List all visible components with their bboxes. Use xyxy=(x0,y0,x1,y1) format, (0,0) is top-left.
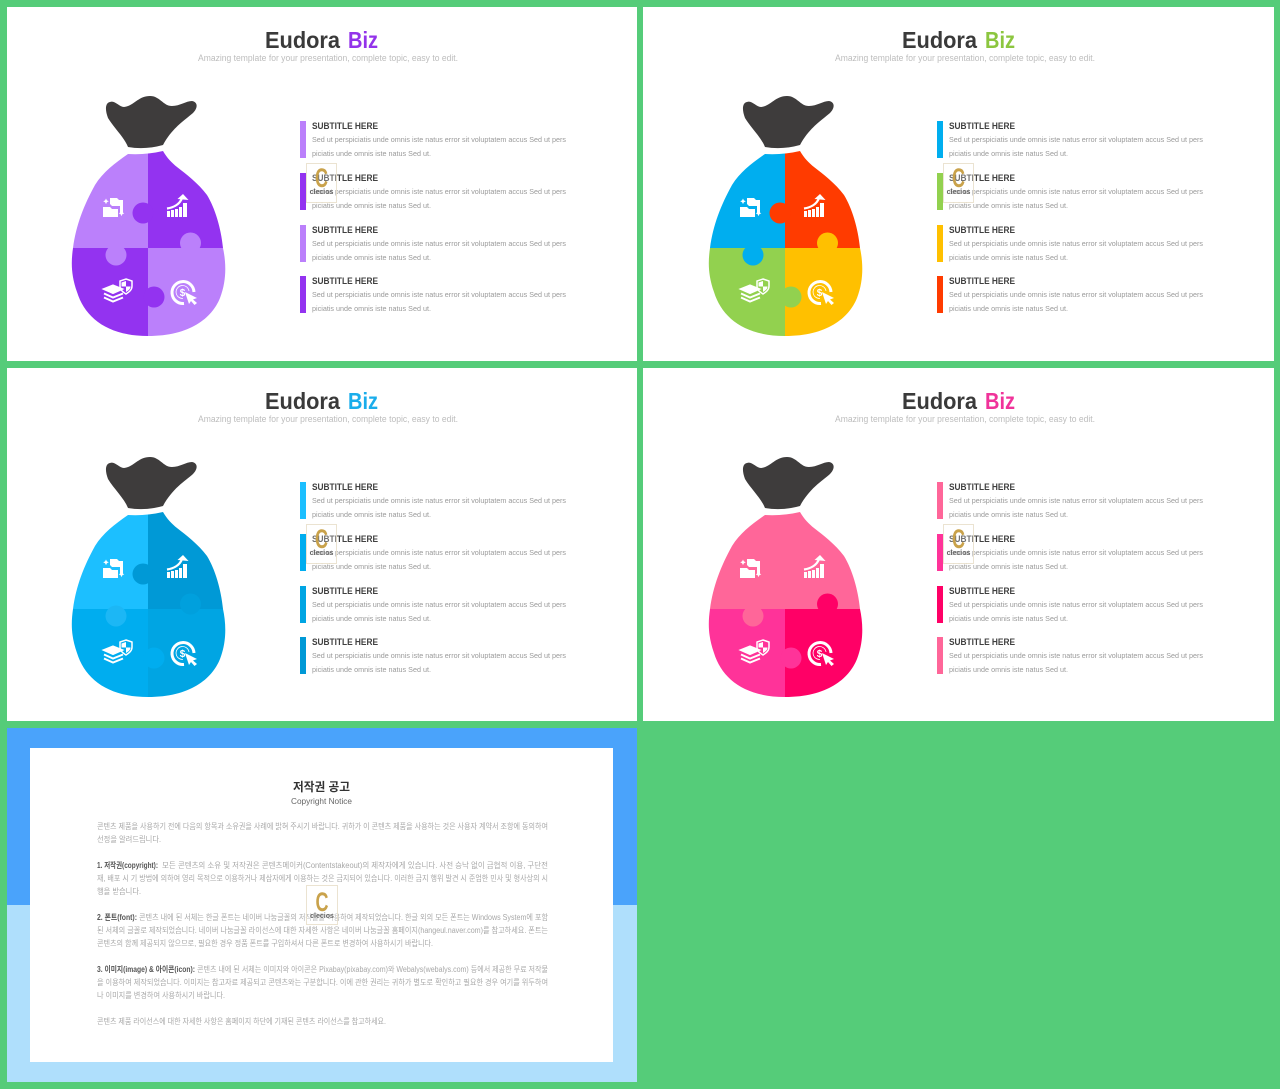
list item 2: SUBTITLE HERE xyxy=(312,534,378,545)
section 2: font: 콘텐츠 내에 된 서체는 한글 폰트는 네이버 나눔글꼴의 저작물을 이용하여 제작되었습니다. 한글 외의 모든 폰트는 Windows System에 포함 xyxy=(139,912,549,922)
list item 3 xyxy=(300,586,566,623)
list item 1: Sed ut perspiciatis unde omnis iste natus error sit voluptatem accus Sed ut pers xyxy=(949,135,1203,144)
puzzle money bag xyxy=(708,512,862,697)
list item 4 xyxy=(300,276,566,313)
tagline: Amazing template for your presentation, complete topic, easy to edit. xyxy=(835,53,1095,63)
list item 3: piciatis unde omnis iste natus Sed ut. xyxy=(312,614,431,623)
watermark: C xyxy=(952,163,965,193)
list item 4: piciatis unde omnis iste natus Sed ut. xyxy=(312,304,431,313)
icon: secure stack xyxy=(741,279,769,302)
list item 3 xyxy=(937,586,1203,623)
section 1: copyright: 모든 콘텐츠의 소유 및 저작권은 콘텐츠메이커(Contentstakeout)의 제작자에게 있습니다. 사전 승낙 없이 금협적 이용, 구단전 xyxy=(162,860,548,870)
icon: secure stack xyxy=(741,640,769,662)
title: Eudora xyxy=(902,27,977,53)
icon: secure stack xyxy=(104,640,132,662)
money bag tie xyxy=(743,457,834,509)
list item 1: SUBTITLE HERE xyxy=(949,482,1015,493)
list item 1: SUBTITLE HERE xyxy=(312,121,378,132)
section 3: image and icon: 을 이용하여 제작되었습니다. 이미지는 참고자료 제공되고 콘텐츠와는 구분합니다. 이에 관한 권리는 귀하가 별도로 확인하고 필요한 경우 여기를 위두하여 xyxy=(97,977,548,987)
title: Biz xyxy=(985,27,1015,53)
list item 3: SUBTITLE HERE xyxy=(949,586,1015,597)
list item 1: Sed ut perspiciatis unde omnis iste natus error sit voluptatem accus Sed ut pers xyxy=(312,135,566,144)
list item 1 xyxy=(300,121,566,158)
icon: growth chart xyxy=(804,555,826,578)
icon: folders xyxy=(103,198,124,217)
tagline: Amazing template for your presentation, complete topic, easy to edit. xyxy=(198,414,458,424)
panel: pink slide xyxy=(643,368,1274,721)
panel: blue slide xyxy=(7,368,637,721)
icon: dollar click xyxy=(809,643,834,666)
list item 4: SUBTITLE HERE xyxy=(949,637,1015,648)
section 2: font: 된 서체의 글꼴로 제작되었습니다. 네이버 나눔글꼴 라이선스에 대한 자세한 사항은 네이버 나눔글꼴 홈페이지(hangeul.naver.com)를 참고하세요. 폰트는 xyxy=(97,925,548,935)
list item 2: piciatis unde omnis iste natus Sed ut. xyxy=(312,201,431,210)
list item 4: SUBTITLE HERE xyxy=(312,637,378,648)
list item 2: piciatis unde omnis iste natus Sed ut. xyxy=(949,562,1068,571)
list item 4: piciatis unde omnis iste natus Sed ut. xyxy=(949,665,1068,674)
list item 3: piciatis unde omnis iste natus Sed ut. xyxy=(949,614,1068,623)
watermark xyxy=(944,163,974,202)
list item 4 xyxy=(300,637,566,674)
list item 1: piciatis unde omnis iste natus Sed ut. xyxy=(312,510,431,519)
title: Biz xyxy=(985,388,1015,414)
slide background xyxy=(643,368,1274,721)
intro paragraph xyxy=(97,821,548,844)
list item 2: SUBTITLE HERE xyxy=(949,534,1015,545)
panel: multicolor slide xyxy=(643,7,1274,361)
tagline: Amazing template for your presentation, complete topic, easy to edit. xyxy=(198,53,458,63)
list item 1: piciatis unde omnis iste natus Sed ut. xyxy=(949,510,1068,519)
icon: secure stack xyxy=(104,279,132,302)
list item 2 xyxy=(937,534,1203,571)
money bag tie xyxy=(106,457,197,509)
list item 3: Sed ut perspiciatis unde omnis iste natus error sit voluptatem accus Sed ut pers xyxy=(949,239,1203,248)
watermark xyxy=(944,524,974,564)
panel: purple slide xyxy=(7,7,637,361)
list item 2: SUBTITLE HERE xyxy=(312,173,378,184)
list item 2: Sed ut perspiciatis unde omnis iste natus error sit voluptatem accus Sed ut pers xyxy=(312,548,566,557)
list item 2: Sed ut perspiciatis unde omnis iste natus error sit voluptatem accus Sed ut pers xyxy=(312,187,566,196)
icon: growth chart xyxy=(167,555,188,578)
list item 1: Sed ut perspiciatis unde omnis iste natus error sit voluptatem accus Sed ut pers xyxy=(949,496,1203,505)
list item 4 xyxy=(937,637,1203,674)
icon: dollar click: $ xyxy=(817,649,823,660)
list item 2 xyxy=(937,173,1203,210)
title: Eudora xyxy=(902,388,977,414)
list item 1: Sed ut perspiciatis unde omnis iste natus error sit voluptatem accus Sed ut pers xyxy=(312,496,566,505)
notice card xyxy=(30,748,613,1062)
watermark: C xyxy=(315,524,328,554)
puzzle money bag xyxy=(72,151,226,336)
list item 2: piciatis unde omnis iste natus Sed ut. xyxy=(949,201,1068,210)
icon: dollar click xyxy=(172,643,197,666)
watermark: clecios xyxy=(947,550,970,557)
light blue band xyxy=(7,905,637,1082)
list item 4: Sed ut perspiciatis unde omnis iste natus error sit voluptatem accus Sed ut pers xyxy=(949,290,1203,299)
notice heading: 저작권 공고 xyxy=(293,779,350,794)
intro paragraph: 선정을 알려드립니다. xyxy=(97,834,161,844)
section 2: font: 2. 폰트(font): xyxy=(97,913,137,922)
list item 1: piciatis unde omnis iste natus Sed ut. xyxy=(949,149,1068,158)
list item 1: piciatis unde omnis iste natus Sed ut. xyxy=(312,149,431,158)
list item 1 xyxy=(937,121,1203,158)
list item 3: SUBTITLE HERE xyxy=(312,225,378,236)
list item 1 xyxy=(937,482,1203,519)
section 3: image and icon: 나 이미지를 변경하여 사용하시기 바랍니다. xyxy=(97,990,225,1000)
puzzle money bag xyxy=(72,512,226,697)
section 1: copyright: 행을 받습니다. xyxy=(97,886,141,896)
slide background xyxy=(643,7,1274,361)
blue band xyxy=(7,728,637,905)
money bag tie xyxy=(743,96,834,148)
closing line: 콘텐츠 제품 라이선스에 대한 자세한 사항은 홈페이지 하단에 기재된 콘텐츠 라이선스를 참고하세요. xyxy=(97,1016,386,1026)
watermark: C xyxy=(315,163,328,193)
list item 3: piciatis unde omnis iste natus Sed ut. xyxy=(312,253,431,262)
list item 1: SUBTITLE HERE xyxy=(312,482,378,493)
watermark: clecios xyxy=(310,189,333,196)
list item 4: piciatis unde omnis iste natus Sed ut. xyxy=(312,665,431,674)
icon: dollar click xyxy=(809,282,834,305)
list item 4: Sed ut perspiciatis unde omnis iste natus error sit voluptatem accus Sed ut pers xyxy=(312,290,566,299)
section 3: image and icon: 3. 이미지(image) & 아이콘(icon): xyxy=(97,964,195,974)
list item 2 xyxy=(300,534,566,571)
title: Biz xyxy=(348,388,378,414)
panel: copyright notice xyxy=(7,728,637,1082)
slide background xyxy=(7,368,637,721)
intro paragraph: 콘텐츠 제품을 사용하기 전에 다음의 항목과 소유권을 사례에 밝혀 주시기 바랍니다. 귀하가 이 콘텐츠 제품을 사용하는 것은 사용자 계약서 조항에 동의하여 xyxy=(97,821,548,831)
watermark: C xyxy=(952,524,965,554)
section 2: font xyxy=(97,912,549,948)
section 3: image and icon: 콘텐츠 내에 된 서체는 이미지와 아이콘은 Pixabay(pixabay.com)와 Webalys(webalys.com) 등에서 제공한 무료 저작물 xyxy=(197,964,548,974)
list item 3: Sed ut perspiciatis unde omnis iste natus error sit voluptatem accus Sed ut pers xyxy=(949,600,1203,609)
title: Biz xyxy=(348,27,378,53)
icon: growth chart xyxy=(167,194,188,217)
watermark: clecios xyxy=(947,189,970,196)
list item 2 xyxy=(300,173,566,210)
puzzle money bag xyxy=(708,151,862,336)
list item 4: piciatis unde omnis iste natus Sed ut. xyxy=(949,304,1068,313)
list item 2: Sed ut perspiciatis unde omnis iste natus error sit voluptatem accus Sed ut pers xyxy=(949,187,1203,196)
list item 4: Sed ut perspiciatis unde omnis iste natus error sit voluptatem accus Sed ut pers xyxy=(949,651,1203,660)
watermark xyxy=(306,163,336,202)
list item 2: piciatis unde omnis iste natus Sed ut. xyxy=(312,562,431,571)
icon: dollar click: $ xyxy=(817,288,823,299)
list item 3 xyxy=(937,225,1203,262)
icon: folders xyxy=(103,559,124,578)
list item 4: SUBTITLE HERE xyxy=(949,276,1015,287)
list item 2: Sed ut perspiciatis unde omnis iste natus error sit voluptatem accus Sed ut pers xyxy=(949,548,1203,557)
icon: dollar click: $ xyxy=(180,288,186,299)
watermark xyxy=(306,524,336,564)
list item 3: Sed ut perspiciatis unde omnis iste natus error sit voluptatem accus Sed ut pers xyxy=(312,239,566,248)
watermark xyxy=(306,886,338,924)
section 1: copyright: 1. 저작권(copyright): xyxy=(97,860,158,870)
section 1: copyright: 재, 배포 시 기 방법에 의하여 영리 목적으로 이용하거나 제삼자에게 이용하는 것은 금지되어 있습니다. 이러한 금지 행위 발견 시 준엄한 민사 및 형사상의 시 xyxy=(97,873,548,883)
list item 2: SUBTITLE HERE xyxy=(949,173,1015,184)
list item 4: Sed ut perspiciatis unde omnis iste natus error sit voluptatem accus Sed ut pers xyxy=(312,651,566,660)
slide background xyxy=(7,7,637,361)
list item 4 xyxy=(937,276,1203,313)
icon: dollar click xyxy=(172,282,197,305)
list item 3 xyxy=(300,225,566,262)
money bag tie xyxy=(106,96,197,148)
list item 3: SUBTITLE HERE xyxy=(949,225,1015,236)
list item 1: SUBTITLE HERE xyxy=(949,121,1015,132)
title: Eudora xyxy=(265,388,340,414)
section 2: font: 콘텐츠의 함께 제공되지 않으므로, 필요한 경우 정품 폰트를 구입하셔서 다른 폰트로 변경하여 사용하시기 바랍니다. xyxy=(97,938,433,948)
icon: growth chart xyxy=(804,194,826,217)
list item 3: piciatis unde omnis iste natus Sed ut. xyxy=(949,253,1068,262)
notice subheading: Copyright Notice xyxy=(291,796,352,806)
list item 3: SUBTITLE HERE xyxy=(312,586,378,597)
list item 1 xyxy=(300,482,566,519)
watermark: C xyxy=(316,887,328,917)
watermark: clecios xyxy=(310,913,334,920)
tagline: Amazing template for your presentation, complete topic, easy to edit. xyxy=(835,414,1095,424)
list item 3: Sed ut perspiciatis unde omnis iste natus error sit voluptatem accus Sed ut pers xyxy=(312,600,566,609)
list item 4: SUBTITLE HERE xyxy=(312,276,378,287)
section 1: copyright xyxy=(97,860,548,896)
icon: dollar click: $ xyxy=(180,649,186,660)
title: Eudora xyxy=(265,27,340,53)
section 3: image and icon xyxy=(97,964,548,1000)
watermark: clecios xyxy=(310,550,333,557)
icon: folders xyxy=(740,198,761,217)
icon: folders xyxy=(740,559,761,578)
